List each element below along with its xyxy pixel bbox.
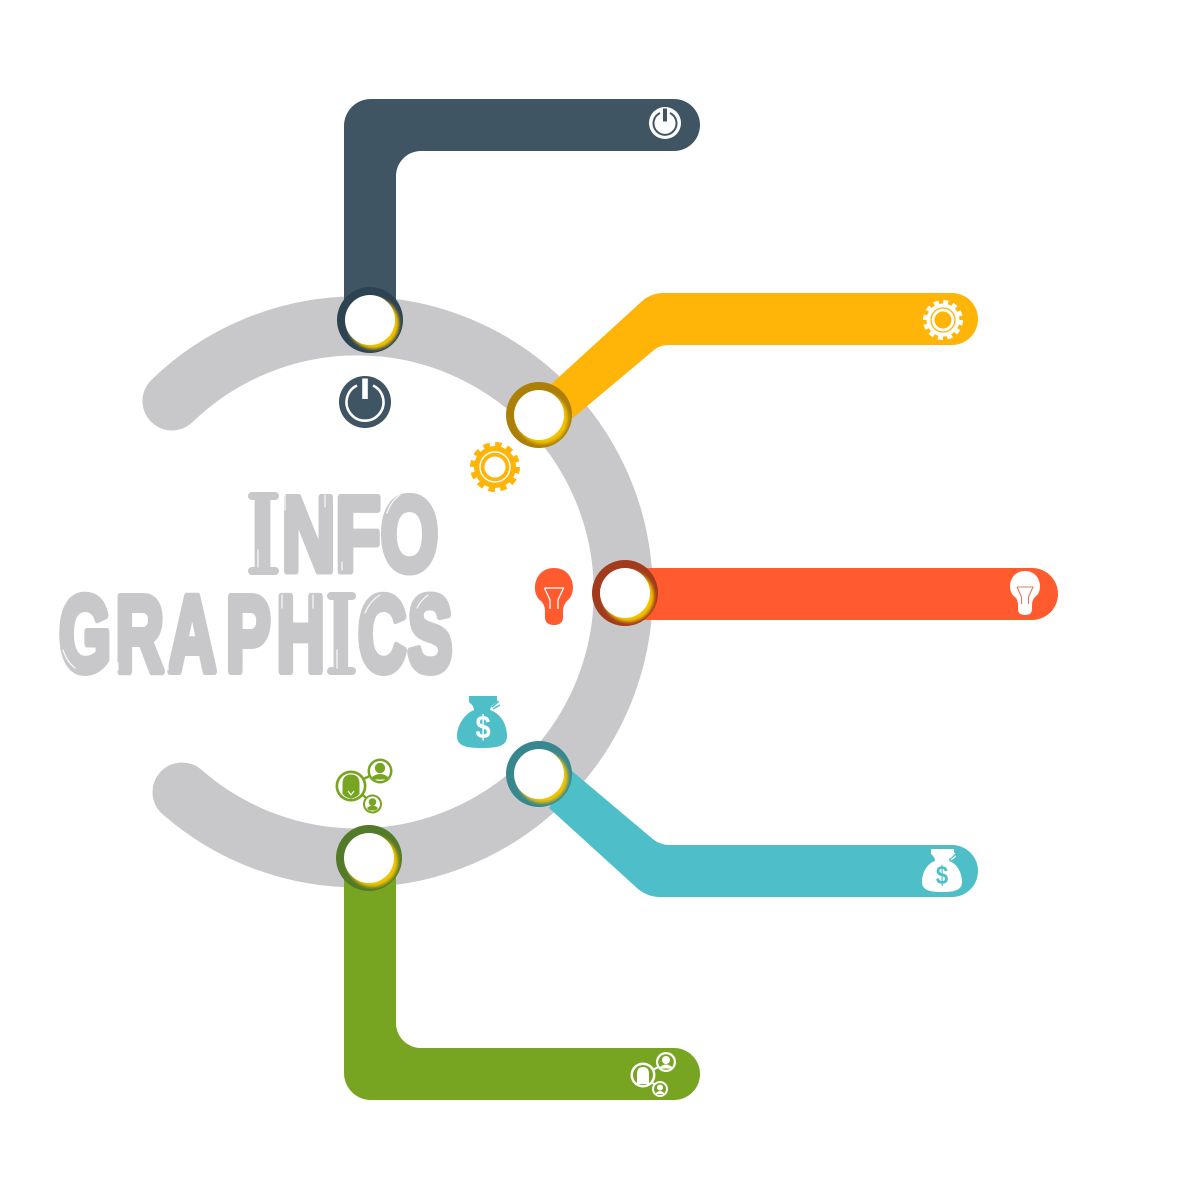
icon: money bag (teal) [457,696,507,748]
node: green [336,825,402,891]
grey ring arc [172,326,623,858]
bar icon: power (white) [649,107,681,139]
bar: teal [549,771,978,897]
title line: INFO: INFO [252,474,439,594]
title: INFO GRAPHICS [59,474,452,695]
bar icon: light bulb (white) [1010,571,1040,615]
node: amber [506,382,572,448]
bar: green (bottom) [344,858,700,1100]
icon: money bag (teal): $ [475,710,491,746]
bar: amber [548,293,978,418]
bar icon: money bag (white) [922,849,962,892]
bar icon: money bag (white): $ [936,861,949,890]
icon: light bulb (orange-red) [535,568,573,625]
node: teal [506,741,572,807]
title line: GRAPHICS: GRAPHICS [59,575,452,695]
node: orange-red [592,560,658,626]
icon: power (dark) [339,376,391,428]
bar: dark slate (top) [344,99,700,320]
title letter serifs [252,496,352,671]
bar icon: people network (white) [630,1052,676,1097]
icon: gear (amber) [472,444,518,490]
bar: orange-red [625,568,1058,620]
icon: people network (green) [336,758,392,814]
title gloss highlights [63,495,428,670]
bar icon: gear (white) [925,302,961,338]
node: dark slate [337,287,403,353]
